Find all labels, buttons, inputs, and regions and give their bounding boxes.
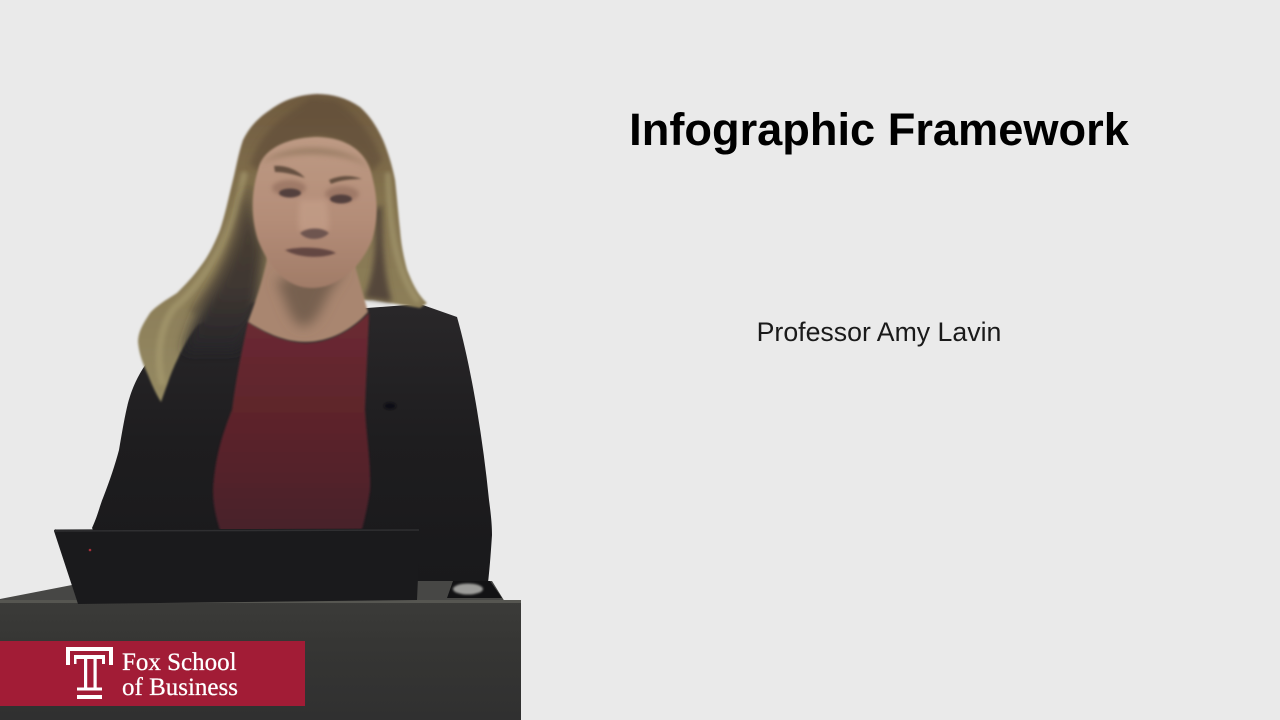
- podium: [0, 528, 521, 720]
- laptop: [54, 528, 420, 604]
- laptop indicator light: [89, 549, 91, 551]
- icon: Temple T logo: [66, 647, 113, 699]
- hair parting shadow: [250, 98, 382, 172]
- microphone: [384, 402, 396, 410]
- logo banner: [0, 641, 305, 706]
- nose: [300, 228, 329, 239]
- forehead shadow: [260, 148, 370, 168]
- neck: [248, 255, 368, 342]
- podium front: [0, 602, 521, 720]
- presenter name: Professor Amy Lavin: [757, 317, 1001, 347]
- red top: [213, 313, 370, 533]
- jacket: [92, 298, 492, 583]
- dark hair behind the right side of the face: [364, 205, 392, 302]
- eyebrows: [274, 166, 305, 178]
- hair: [138, 94, 427, 402]
- remote highlight: [453, 584, 483, 594]
- logo wordmark: Fox School: [122, 649, 237, 676]
- podium top shelf: [0, 581, 505, 603]
- hair strands: [159, 175, 417, 382]
- title: Infographic Framework: [629, 104, 1129, 155]
- neck shadow: [276, 268, 345, 326]
- eye shadows: [272, 180, 306, 196]
- logo wordmark: of Business: [122, 674, 238, 700]
- face: [253, 137, 377, 288]
- presenter: [92, 94, 492, 583]
- logo wordmark: [122, 649, 238, 700]
- nose shadow: [298, 200, 329, 232]
- mouth: [285, 248, 336, 257]
- dark hair behind the left side of the face: [184, 190, 264, 352]
- laptop top edge: [55, 530, 419, 531]
- eyes: [279, 188, 301, 198]
- podium top edge highlight: [0, 600, 521, 603]
- remote device: [447, 581, 502, 598]
